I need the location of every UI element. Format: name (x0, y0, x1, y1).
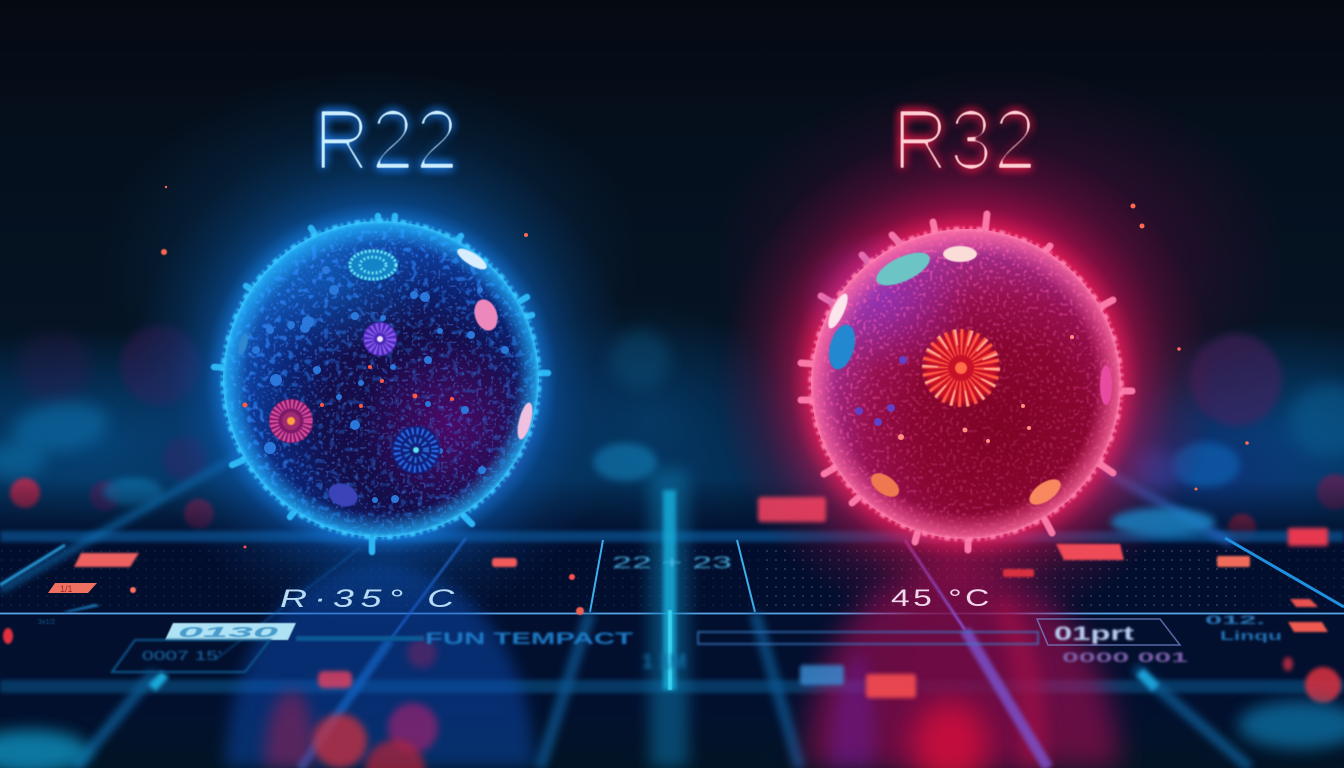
organelle: blue disc (392, 426, 440, 474)
red sparks (242, 365, 454, 408)
organelle: violet disc (363, 322, 397, 356)
value badge: 0130 (178, 624, 280, 641)
title: R22: R22 (313, 93, 459, 188)
speckle texture (808, 226, 1124, 542)
sphere glow (131, 129, 631, 629)
bumpy rim (810, 228, 1122, 540)
floor reflection: R32 (805, 540, 1120, 768)
value label: 01prt (1054, 624, 1135, 645)
organelle: magenta disc (269, 399, 313, 443)
R32 data strip: 012. (1205, 613, 1265, 627)
R22 data strip (112, 623, 686, 673)
right sphere R32 (716, 134, 1216, 634)
surface spikes (214, 216, 548, 552)
left side labels: 3x1/2 (38, 619, 55, 626)
R22 data strip: 0007 15' (142, 648, 222, 663)
surface spikes (801, 214, 1132, 550)
R22 data strip: 1 1M (642, 651, 686, 673)
organelle: teal patch (872, 246, 934, 292)
sphere glow (716, 134, 1216, 634)
R32 data strip: 0000 001 (1062, 649, 1188, 665)
membrane patches (236, 245, 535, 441)
right side labels (0, 497, 1344, 768)
sphere body (811, 229, 1121, 539)
value badge (165, 623, 296, 641)
organelle: blue patch (824, 322, 860, 372)
bubble texture (220, 218, 542, 540)
temperature readout: R32: 45 °C (891, 585, 993, 612)
R32 data strip (698, 613, 1282, 665)
floor reflection: R22 (225, 543, 535, 768)
organelle: red starburst (925, 332, 997, 404)
central glowing column (650, 470, 688, 768)
organelle: small violet disc (325, 480, 361, 510)
drifting sparks (161, 186, 1249, 491)
red sparks (898, 335, 1074, 443)
left side labels: 1/1 (60, 584, 73, 594)
bumpy rim (222, 220, 540, 538)
membrane patches (825, 246, 1112, 510)
bokeh lights behind the spheres (0, 325, 1344, 542)
left sphere R22 (131, 129, 631, 629)
metric label: FUN TEMPACT (425, 629, 634, 648)
organelle: cyan disc (348, 249, 398, 281)
sphere body (223, 221, 539, 537)
title: R32: R32 (892, 93, 1037, 188)
left side labels (3, 546, 584, 644)
floor grid (0, 455, 1344, 768)
R32 data strip: Linqu (1220, 628, 1282, 643)
temperature readout: R22: R·35° C (280, 584, 461, 612)
center scale readout: 22 + 23 (612, 553, 732, 572)
